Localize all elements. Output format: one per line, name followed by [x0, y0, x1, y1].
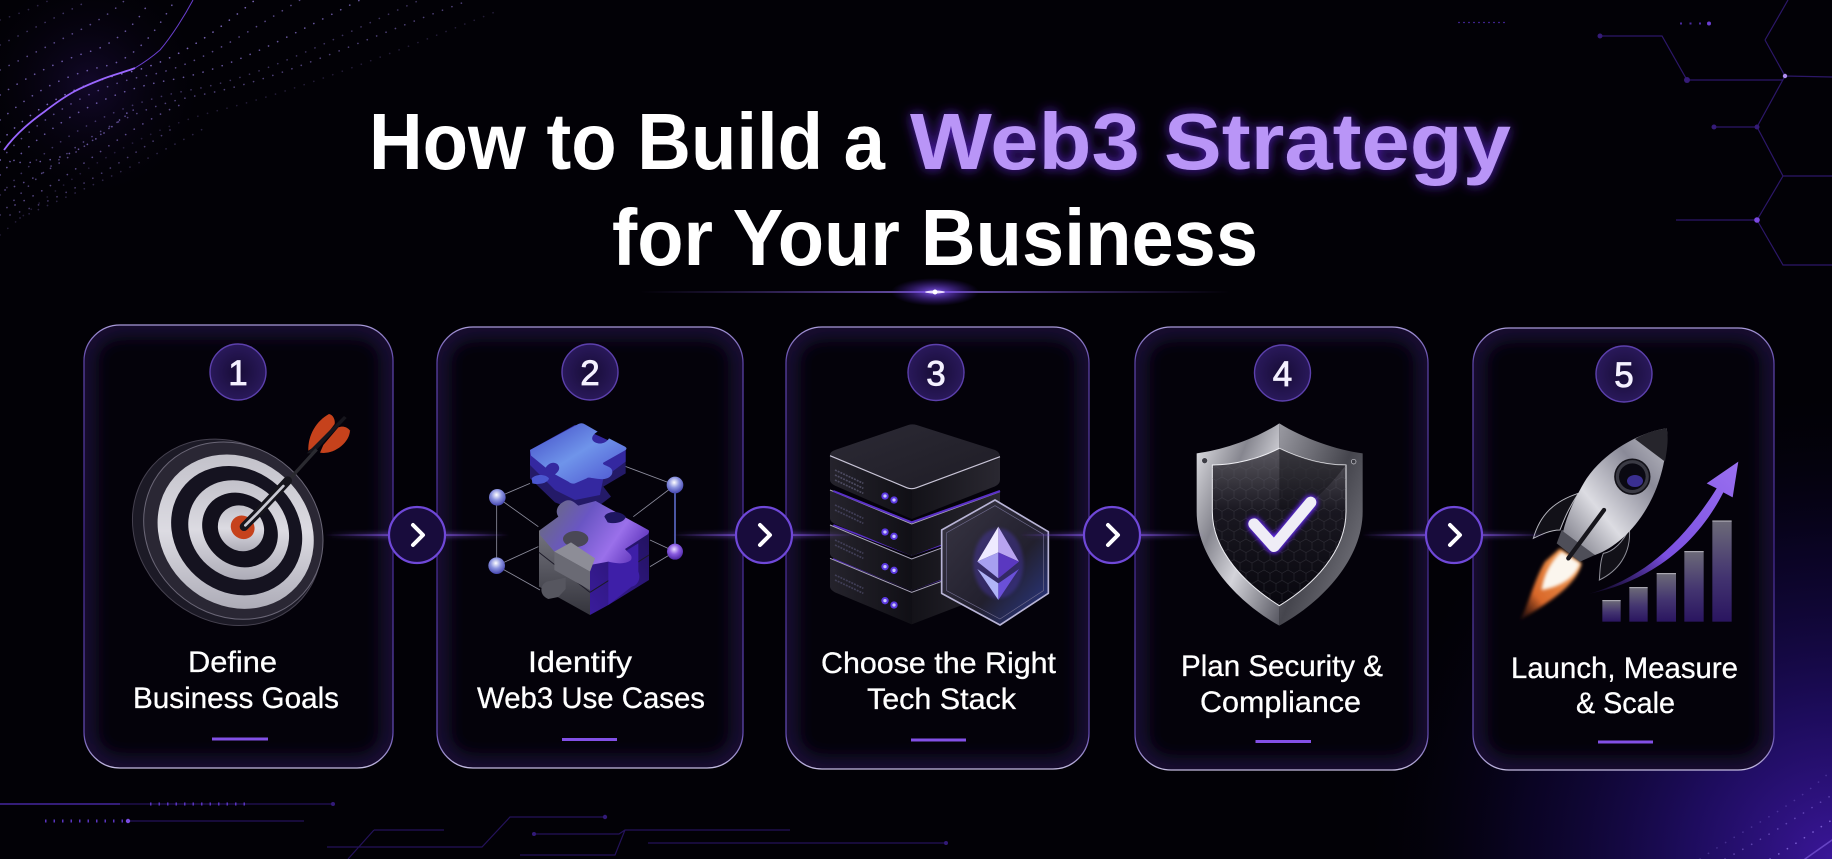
- arrow: step 4 to 5: [1362, 507, 1546, 563]
- number badge 5: 5: [1614, 356, 1634, 395]
- number badge 1: 1: [228, 354, 248, 393]
- label: [133, 646, 339, 715]
- label: Define: [188, 646, 277, 679]
- title: [369, 97, 1512, 282]
- panel: step 2 Identify Web3 Use Cases: [437, 327, 743, 768]
- underline accent: [562, 738, 617, 741]
- number badge 4: 4: [1273, 355, 1292, 394]
- panel: step 1 Define Business Goals: [84, 325, 393, 768]
- label: Launch, Measure: [1511, 652, 1738, 685]
- decoration: circuit traces bottom left: [0, 802, 948, 859]
- panel: step 4 Plan Security & Compliance: [1135, 327, 1428, 770]
- icon: puzzle pieces and nodes: [488, 423, 683, 615]
- number badge 2: [562, 344, 618, 400]
- panel: step 3 Choose the Right Tech Stack: [786, 327, 1089, 769]
- panel: step 5 Launch, Measure & Scale: [1473, 328, 1774, 770]
- label: Compliance: [1200, 686, 1361, 719]
- label: Business Goals: [133, 682, 339, 715]
- icon: target with dart: [94, 401, 360, 664]
- label: [821, 647, 1057, 716]
- label: [1181, 650, 1383, 719]
- decoration: dotted glow lines bottom right: [1700, 770, 1832, 859]
- decoration: dotted particle wave top left: [0, 0, 500, 235]
- icon: rocket with growth chart: [1520, 428, 1738, 622]
- label: Plan Security &: [1181, 650, 1383, 683]
- number badge 3: [908, 344, 964, 400]
- number badge 3: 3: [926, 354, 946, 394]
- arrow: step 1 to 2: [325, 507, 509, 563]
- label: & Scale: [1576, 687, 1675, 720]
- underline accent: [911, 738, 966, 742]
- label: Tech Stack: [867, 683, 1017, 716]
- icon: server stack with Ethereum hexagon: [830, 424, 1048, 625]
- number badge 5: [1596, 346, 1652, 402]
- arrow: step 2 to 3: [672, 507, 856, 563]
- number badge 4: [1254, 345, 1310, 401]
- title line 1 white: How to Build a: [369, 97, 885, 186]
- number badge 1: [210, 344, 266, 400]
- arrow: step 3 to 4: [1020, 507, 1204, 563]
- label: [1511, 652, 1738, 720]
- label: Choose the Right: [821, 647, 1057, 680]
- number badge 2: 2: [580, 354, 600, 393]
- underline accent: [1256, 740, 1311, 743]
- icon: shield with check mark: [1197, 423, 1363, 626]
- label: Web3 Use Cases: [477, 682, 705, 715]
- underline accent: [1598, 740, 1653, 744]
- decoration: hexagon circuit lines top right: [1458, 0, 1832, 265]
- underline accent: [212, 738, 268, 740]
- title highlight Web3 Strategy: Web3 Strategy: [910, 97, 1512, 186]
- label: Identify: [528, 646, 632, 679]
- label: [477, 646, 705, 715]
- title line 2: for Your Business: [612, 193, 1258, 282]
- title divider glow: [640, 278, 1230, 306]
